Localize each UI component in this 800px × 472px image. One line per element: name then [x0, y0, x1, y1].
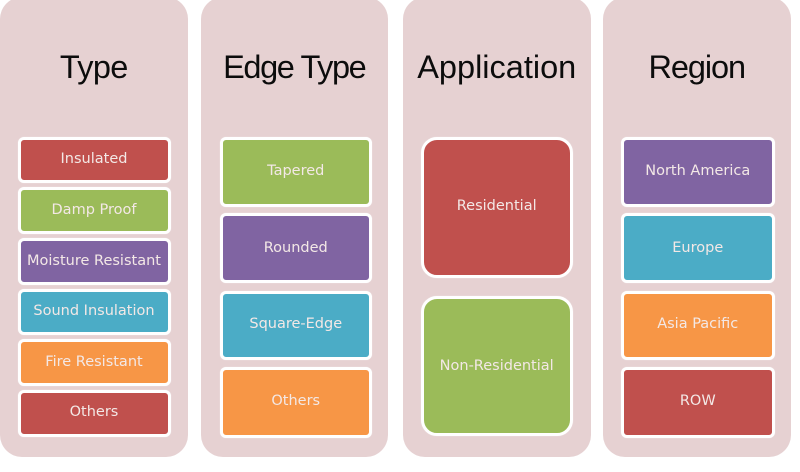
box: North America: North America [645, 163, 750, 179]
panel: Edge Type [200, 0, 388, 457]
heading: Edge Type: Edge Type [223, 49, 365, 85]
box: Others: Others [271, 393, 320, 409]
panel: Region [603, 0, 790, 457]
box: ROW [621, 367, 774, 438]
box: Residential: Residential [457, 198, 537, 214]
box: Fire Resistant [18, 339, 170, 386]
box: Residential [421, 137, 573, 278]
panel: Application [403, 0, 590, 457]
box: Insulated [18, 137, 170, 183]
box: ROW: ROW [680, 393, 716, 409]
box: Europe: Europe [672, 240, 723, 256]
box: Rounded: Rounded [264, 240, 328, 256]
box: Asia Pacific [621, 290, 774, 360]
box: Tapered [220, 137, 372, 206]
box: Damp Proof [18, 187, 170, 234]
heading: Region: Region [649, 49, 745, 85]
box: Others [220, 367, 372, 438]
box: Moisture Resistant [18, 238, 170, 285]
panel: Type [0, 0, 188, 457]
box: Square-Edge [220, 290, 372, 360]
box: Asia Pacific: Asia Pacific [657, 316, 738, 332]
box: Non-Residential: Non-Residential [440, 358, 554, 374]
box: Europe [621, 212, 774, 282]
box: Tapered: Tapered [267, 163, 324, 179]
box: North America [621, 137, 774, 206]
box: Sound Insulation [18, 289, 170, 335]
box: Sound Insulation: Sound Insulation [33, 303, 155, 319]
heading: Type: Type [60, 49, 128, 85]
box: Moisture Resistant: Moisture Resistant [27, 252, 161, 268]
box: Insulated: Insulated [61, 151, 127, 167]
box: Others: Others [70, 404, 118, 420]
box: Non-Residential [421, 296, 573, 436]
box: Others [18, 390, 170, 437]
box: Rounded [220, 212, 372, 282]
box: Square-Edge: Square-Edge [249, 316, 342, 332]
box: Fire Resistant: Fire Resistant [45, 354, 143, 370]
box: Damp Proof: Damp Proof [52, 202, 136, 218]
heading: Application: Application [417, 49, 576, 85]
